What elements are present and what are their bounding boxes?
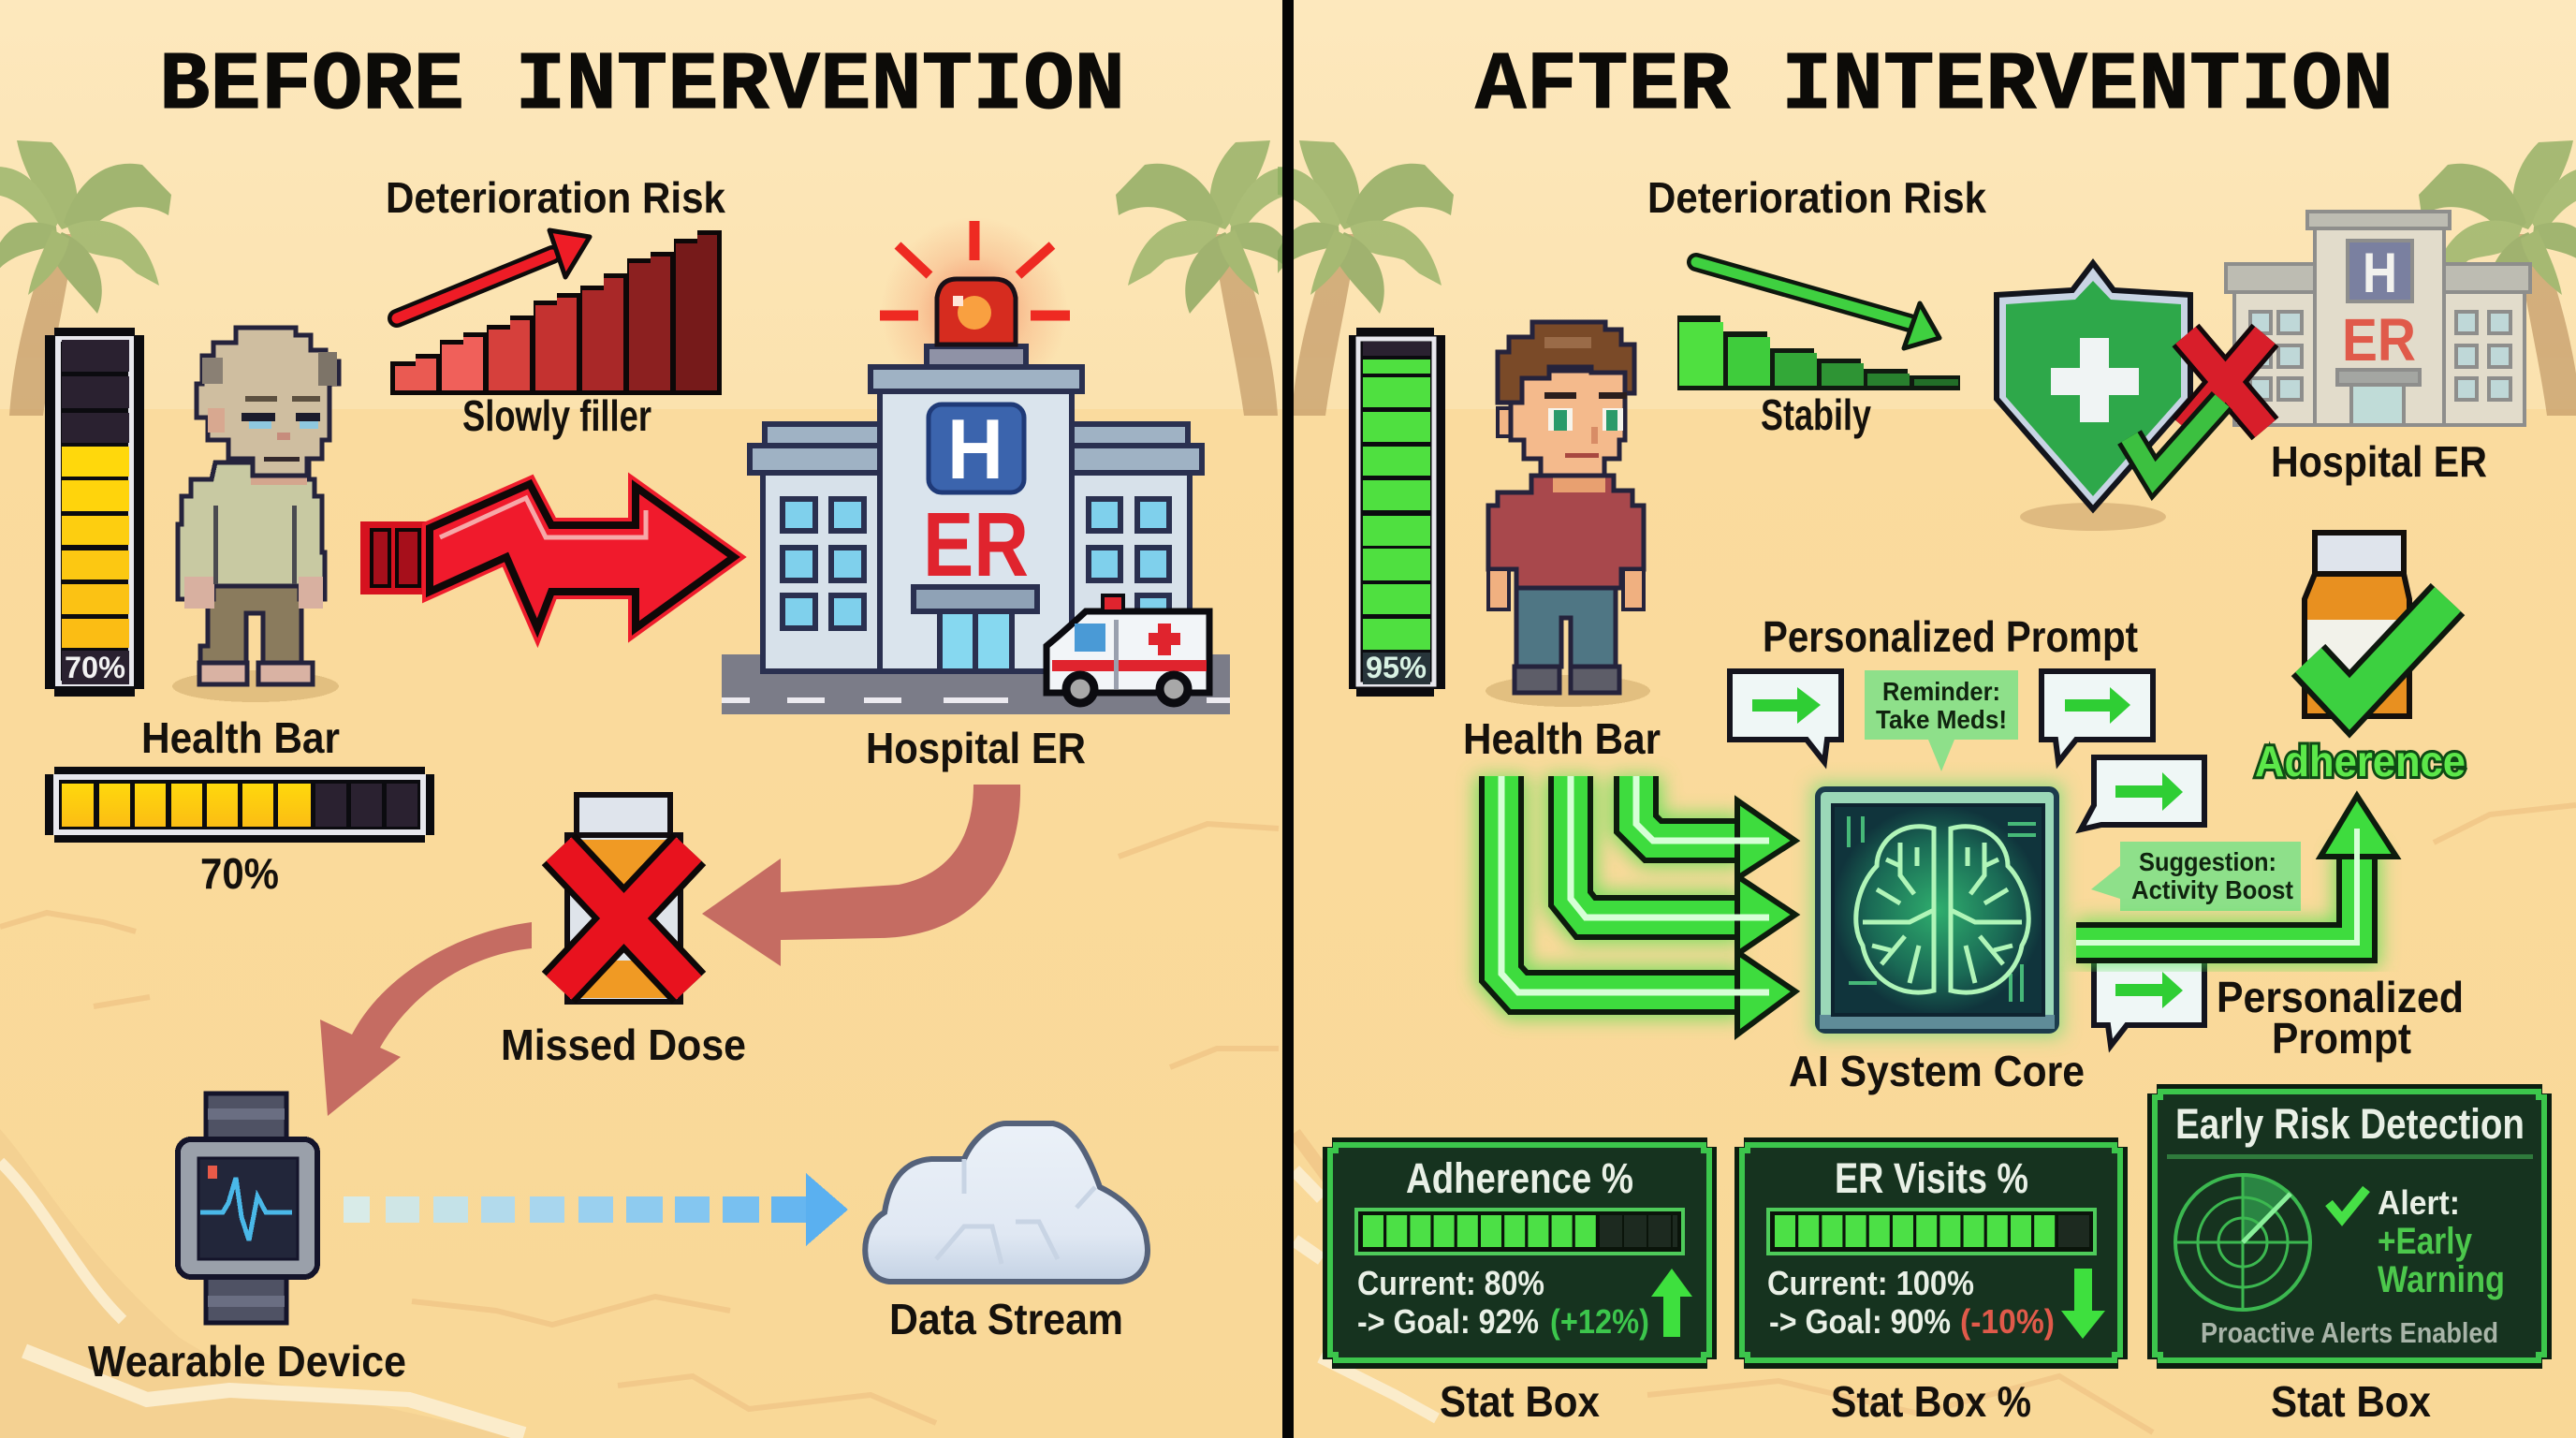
stat box: early risk detection: Warning <box>2378 1259 2505 1300</box>
faded arrow: hospital to missed dose <box>702 785 1020 966</box>
old patient character <box>172 328 339 702</box>
label: data stream: Data Stream <box>889 1295 1123 1343</box>
siren dome <box>937 279 1016 345</box>
label: deterioration risk: Deterioration Risk <box>386 173 725 222</box>
horizontal health bar 70% <box>45 767 434 843</box>
label: personalized prompt right: Personalized <box>2217 973 2464 1021</box>
panel: after intervention <box>1323 40 2552 1426</box>
stat box: early risk detection: Proactive Alerts Enabled <box>2201 1316 2498 1349</box>
stat box: early risk detection: +Early <box>2378 1221 2473 1262</box>
title: after: AFTER INTERVENTION <box>1475 40 2393 133</box>
ER sign: ER <box>923 493 1029 595</box>
stat box: early risk detection: Early Risk Detection <box>2175 1100 2525 1148</box>
icon: wearable smartwatch <box>178 1093 317 1323</box>
speech bubble with arrow 4 <box>2094 960 2204 1046</box>
label: personalized prompt right: Prompt <box>2272 1014 2411 1063</box>
vertical health bar 70%: 70% <box>65 651 125 684</box>
vertical health bar 70% <box>45 328 144 697</box>
brain left hemisphere <box>1856 827 1934 992</box>
palm tree: after panel right <box>2419 140 2576 416</box>
hospital wings and tower <box>750 346 1202 671</box>
label: health bar: Health Bar <box>1463 714 1661 763</box>
radar <box>2175 1174 2310 1310</box>
stat box: adherence <box>1323 1137 1717 1369</box>
label: slowly filler: Slowly filler <box>462 391 651 440</box>
speech bubble with arrow 3 <box>2081 757 2204 829</box>
speech bubble: suggestion: Activity Boost <box>2131 875 2293 904</box>
label: hospital ER: Hospital ER <box>2271 437 2487 486</box>
road <box>722 654 1230 714</box>
faded hospital ER <box>2226 212 2530 425</box>
green output arrow to adherence <box>2076 796 2396 943</box>
icon: adherence pill bottle with check <box>2305 533 2448 716</box>
label: 70%: 70% <box>200 849 279 898</box>
speech bubble: reminder: Take Meds! <box>1876 705 2007 734</box>
stat box: adherence: Current: 80% <box>1357 1264 1544 1302</box>
palm tree: after panel left <box>1278 140 1454 416</box>
palm tree: before panel right <box>1116 140 1292 416</box>
icon: cloud <box>865 1123 1148 1282</box>
faded hospital ER: ER <box>2342 306 2416 374</box>
label: adherence: Adherence <box>2255 737 2466 785</box>
green input arrows into AI core <box>1501 776 1795 1034</box>
stat box: ER visits: (-10%) <box>1960 1302 2055 1341</box>
speech bubble: suggestion <box>2091 842 2301 911</box>
stat box: ER visits: ER Visits % <box>1835 1154 2028 1202</box>
vertical health bar 95%: 95% <box>1366 651 1427 684</box>
vertical health bar 95% <box>1349 328 1445 697</box>
label: stat box 3: Stat Box <box>2271 1377 2431 1426</box>
stat box: adherence: (+12%) <box>1550 1302 1649 1341</box>
hospital sign H: H <box>947 403 1003 497</box>
stat box: early risk detection: Alert: <box>2378 1183 2460 1222</box>
center divider <box>1282 0 1294 1438</box>
brain right hemisphere <box>1951 827 2028 992</box>
title: before: BEFORE INTERVENTION <box>159 40 1125 133</box>
dashed blue data stream arrow <box>344 1173 848 1246</box>
stat box: adherence: -> Goal: 92% <box>1357 1302 1539 1341</box>
falling staircase chart <box>1677 315 1960 390</box>
speech bubble: suggestion: Suggestion: <box>2139 847 2276 876</box>
big red lightning arrow <box>360 484 734 628</box>
speech bubble: reminder: Reminder: <box>1882 677 2000 706</box>
stat box: ER visits: Current: 100% <box>1767 1264 1974 1302</box>
rising risk staircase chart <box>390 230 722 395</box>
siren rays <box>880 221 1070 315</box>
label: personalized prompt top: Personalized Prompt <box>1763 612 2138 661</box>
panel: before intervention <box>45 40 1230 1386</box>
speech bubble with arrow 1 <box>1730 671 1841 762</box>
hospital ER building with siren and ambulance <box>722 217 1230 714</box>
faded arrow: missed dose to wearable <box>320 922 532 1116</box>
speech bubble: reminder <box>1865 670 2018 771</box>
stat box: ER visits: -> Goal: 90% <box>1769 1302 1951 1341</box>
label: deterioration risk: Deterioration Risk <box>1647 173 1986 222</box>
label: stat box 2: Stat Box % <box>1831 1377 2031 1426</box>
faded hospital ER: H <box>2363 242 2397 304</box>
label: hospital ER: Hospital ER <box>866 724 1086 772</box>
ambulance <box>1046 595 1209 703</box>
label: stabily: Stabily <box>1761 390 1871 439</box>
hospital sign H <box>929 403 1024 497</box>
label: wearable device: Wearable Device <box>88 1337 406 1386</box>
label: missed dose: Missed Dose <box>501 1020 746 1069</box>
stat box: ER visits <box>1734 1137 2128 1369</box>
label: health bar: Health Bar <box>141 713 340 762</box>
speech bubble with arrow 2 <box>2042 671 2153 762</box>
icon: shield with cross, X and check <box>1997 263 2265 531</box>
palm tree: before panel left <box>0 140 171 416</box>
rising red arrow <box>397 230 590 318</box>
falling green arrow <box>1696 262 1939 348</box>
stat box: early risk detection <box>2147 1084 2552 1369</box>
label: AI system core: AI System Core <box>1789 1047 2085 1095</box>
AI system core chip with brain <box>1812 784 2062 1036</box>
label: personalized prompt right <box>2217 973 2464 1063</box>
stat box: adherence: Adherence % <box>1406 1154 1633 1202</box>
label: stat box 1: Stat Box <box>1440 1377 1600 1426</box>
healthy patient character <box>1486 322 1650 707</box>
icon: missed dose pill bottle <box>559 795 689 1002</box>
